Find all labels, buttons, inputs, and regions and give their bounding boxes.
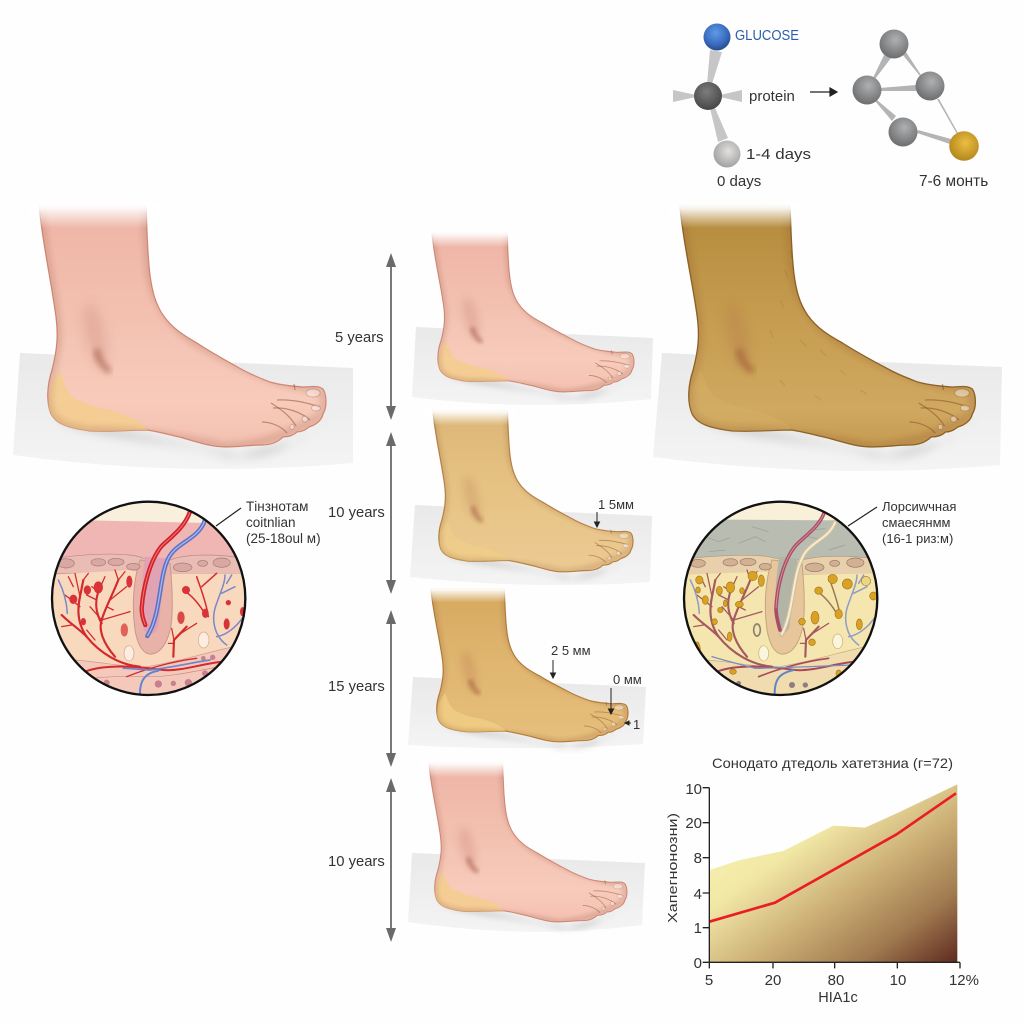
molecule bonds right [873,52,958,144]
timeline arrow: 10 years [328,432,396,594]
follicle [765,560,804,654]
x axis ticks: 20 [765,972,781,989]
chart area [703,784,960,968]
timeline arrow: final 10 years: 10 years [328,854,385,870]
y axis title: Хапегнонозни) [665,813,680,923]
annotation: 1 [625,717,640,732]
foot: 10 years glycated [410,409,652,585]
foot: 15 years [408,587,646,748]
callout: healthy tissue [216,499,321,546]
annotation: 2.5 mm: 2 5 мм [551,643,591,658]
foot: 10 years healthy [408,761,645,932]
molecule: glucose sphere [704,24,730,50]
timeline arrow: 10 years: 10 years [328,505,385,521]
chart title: Сонодато дтедоль хатетзниа (г=72) [712,755,953,771]
arrow: reaction [810,88,837,96]
timeline arrow: 15 years: 15 years [328,679,385,695]
y axis ticks: 1 [694,920,702,937]
y axis ticks: 8 [694,850,702,867]
dermis [685,572,876,666]
lower band [76,646,231,694]
callout: glycated tissue: (16-1 риз:м) [882,531,953,546]
label: days upper: 1-4 days [746,146,811,163]
cells [691,558,864,572]
annotation: 1.5 mm [594,497,634,527]
foot: large healthy [13,203,353,469]
callout: glycated tissue: Лорсиwчная [882,499,956,514]
dermis [53,570,244,666]
label: glucose: GLUCOSE [735,28,799,44]
follicle [133,560,172,654]
foot: 5 years [412,231,653,405]
annotation: 1.5 mm: 1 5мм [598,497,634,512]
callout: glycated tissue: смаесянмм [882,515,951,530]
annotation: 1: 1 [633,717,640,732]
molecule diagram: glucose binding to protein [673,24,988,190]
dermal band [47,554,250,573]
timeline arrow: 5 years: 5 years [335,330,384,346]
label: zero days: 0 days [717,173,761,190]
x axis ticks: 5 [705,972,713,989]
x axis ticks: 80 [828,972,844,989]
pale cells [124,632,209,661]
trees [694,570,829,667]
x axis title: HIA1c [818,990,858,1006]
lower band [708,646,863,694]
label: protein: protein [749,88,795,105]
bottom vessels [712,657,855,693]
y axis ticks: 20 [685,815,702,832]
trees [62,570,197,667]
AGE deposits [694,571,877,677]
stiffened epidermis [694,520,867,560]
y axis ticks [685,781,702,972]
band [679,555,882,575]
red blobs [69,576,245,637]
molecule bonds left [673,50,742,142]
main artery and vein [147,520,205,636]
y axis ticks: 10 [685,781,702,798]
callout: glycated tissue [848,499,956,546]
panel: glycated skin cross-section [682,500,878,696]
timeline arrow: final 10 years [328,778,396,942]
molecule: protein sphere [694,82,722,110]
cells [58,558,230,572]
annotation: 0 mm [608,672,642,714]
bottom vessels [85,658,223,693]
timeline arrow: 5 years [335,253,396,420]
label: months: 7-6 монть [919,173,988,190]
callout: healthy tissue: coitnlian [246,515,296,530]
line chart: HbA1c [665,755,979,1006]
panel: healthy skin cross-section [50,500,246,696]
timeline arrow: 15 years [328,610,396,767]
callout: healthy tissue: Тінзнотам [246,499,308,514]
y axis ticks: 4 [694,886,702,903]
molecule: crosslinked spheres [852,30,979,161]
molecule: lower sphere [714,140,740,168]
callout: healthy tissue: (25-18oul м) [246,531,321,546]
foot: large glycated [653,203,1002,471]
annotation: 2.5 mm [550,643,591,678]
annotation: 0 mm: 0 мм [613,672,642,687]
x axis ticks: 10 [890,972,906,989]
epidermis [56,520,234,574]
y axis ticks: 0 [694,955,702,972]
pale cells [754,624,843,661]
main vessels [781,522,835,635]
x axis ticks [705,972,979,989]
hair texture [770,250,867,400]
x axis ticks: 12% [949,972,979,989]
